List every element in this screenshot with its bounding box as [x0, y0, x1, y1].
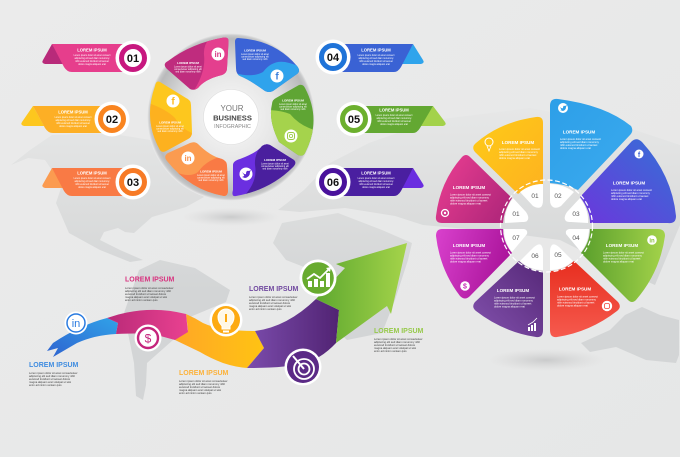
text block: yellow: enim ad minim veniam quis	[179, 391, 212, 395]
tab numbers: 05	[554, 252, 562, 259]
text block: pink: LOREM IPSUM	[125, 276, 175, 284]
pie chart	[436, 99, 676, 337]
tab numbers: 01	[512, 211, 520, 218]
pie segment: green: in	[649, 238, 655, 244]
text block: green	[374, 328, 424, 353]
pie segment: red	[550, 261, 620, 337]
arrow head: green	[316, 243, 407, 343]
shadow under wheel	[183, 208, 279, 226]
icon: target	[284, 348, 322, 386]
text block: purple: enim ad minim veniam quis	[249, 307, 282, 311]
wheel text: Lorem ipsum dolor sit amet	[156, 125, 184, 128]
pie segment: green: nibh euismod tincidunt ut laoreet	[603, 256, 641, 260]
pie segment: red: LOREM IPSUM	[559, 286, 591, 292]
tag 03	[42, 164, 151, 200]
pie segment: yellow: dolore magna aliquam erat	[499, 156, 530, 160]
wheel text: LOREM IPSUM	[200, 170, 222, 174]
world map	[11, 108, 680, 400]
tag 06: LOREM IPSUM	[361, 170, 391, 176]
text block: green: euismod tincidunt ut laoreet dolore	[374, 343, 416, 347]
tag 05: nibh euismod tincidunt ut laoreet	[377, 120, 411, 123]
wheel text: sed diam nonummy nibh	[242, 59, 268, 61]
tag 06: Lorem ipsum dolor sit amet consect	[358, 177, 395, 180]
pie dashed ring	[500, 180, 592, 272]
tag 06: 06	[327, 177, 339, 189]
text block: pink: Lorem ipsum dolor sit amet consectetuer	[125, 286, 174, 290]
pie segment: magenta: $	[463, 284, 467, 290]
icon: dollar	[134, 324, 162, 352]
text block: yellow: LOREM IPSUM	[179, 370, 229, 377]
tag 02: 02	[106, 114, 118, 126]
pie segment: red: adipiscing elit sed diam nonummy	[557, 298, 597, 302]
pie segment: magenta	[436, 229, 512, 298]
wheel segment: yellow	[150, 82, 192, 152]
tag 02: LOREM IPSUM	[58, 110, 88, 114]
wheel text: consectetuer adipiscing elit	[241, 56, 269, 58]
pie segment: green: Lorem ipsum dolor sit amet consect	[603, 250, 644, 254]
tab numbers: 04	[572, 235, 580, 242]
tag 02: Lorem ipsum dolor sit amet consect	[55, 116, 92, 119]
pie segment: magenta: Lorem ipsum dolor sit amet consect	[450, 250, 491, 254]
tag 05: 05	[348, 114, 360, 126]
wheel text: LOREM IPSUM	[244, 48, 266, 52]
pie segment: dark blue: f	[638, 152, 641, 159]
tab numbers: 02	[554, 193, 562, 200]
tag 01: nibh euismod tincidunt ut laoreet	[75, 60, 109, 63]
pie segment: green	[581, 229, 665, 302]
tag 01: Lorem ipsum dolor sit amet consect	[74, 54, 111, 57]
wheel	[148, 34, 314, 200]
pie segment: red: nibh euismod tincidunt ut laoreet	[557, 300, 595, 304]
pie segment: purple: dolore magna aliquam erat	[494, 304, 525, 308]
text block: blue: euismod tincidunt ut laoreet dolore	[29, 377, 71, 381]
wheel text: Lorem ipsum dolor sit amet	[261, 162, 289, 166]
pie segment: yellow: adipiscing elit sed diam nonummy	[499, 150, 539, 154]
wheel text	[156, 48, 307, 182]
text block: blue	[29, 362, 79, 387]
tag 04: adipiscing elit sed diam nonummy	[359, 57, 394, 60]
wheel text: LOREM IPSUM	[282, 98, 304, 102]
tag 05	[336, 102, 446, 136]
wheel segment: pink	[164, 38, 229, 90]
text block: pink: enim ad minim veniam quis	[125, 298, 158, 302]
tag 04: LOREM IPSUM	[361, 48, 391, 52]
tag 04: dolore magna aliquam erat	[362, 63, 390, 66]
text block: blue: magna aliquam erat volutpat ut wisi	[29, 380, 72, 384]
icon: dollar: $	[145, 332, 152, 346]
pie segment: red: Lorem ipsum dolor sit amet consect	[557, 294, 598, 298]
pie segment: yellow	[473, 117, 543, 194]
arrow segment: pink	[107, 310, 188, 340]
text block: yellow: Lorem ipsum dolor sit amet consectetuer	[179, 379, 228, 383]
wheel text: Lorem ipsum dolor sit amet	[174, 66, 202, 68]
wheel segment: purple	[232, 144, 296, 196]
wheel icons: f	[275, 72, 279, 82]
pie segment: pink: dolore magna aliquam erat	[450, 202, 481, 206]
wheel text: LOREM IPSUM	[264, 158, 286, 162]
wheel text: sed diam nonummy nibh	[262, 168, 288, 170]
tag 06	[316, 164, 424, 200]
text block: purple: Lorem ipsum dolor sit amet consectetuer	[249, 295, 298, 299]
text block: yellow: euismod tincidunt ut laoreet dolore	[179, 385, 221, 389]
pie segment: blue: Lorem ipsum dolor sit amet consect	[560, 137, 601, 141]
wheel text: consectetuer adipiscing elit	[261, 165, 289, 168]
wheel text: sed diam nonummy nibh	[198, 180, 224, 182]
text block: yellow: magna aliquam erat volutpat ut wisi	[179, 388, 222, 392]
text block: green: magna aliquam erat volutpat ut wisi	[374, 346, 417, 350]
text block: blue: LOREM IPSUM	[29, 362, 79, 369]
tag 03: dolore magna aliquam erat	[78, 186, 106, 189]
wheel icons: in	[214, 50, 222, 59]
text block: pink: magna aliquam erat volutpat ut wisi	[125, 295, 168, 299]
pie segment: purple: nibh euismod tincidunt ut laoreet	[494, 302, 532, 306]
pie segment: yellow: Lorem ipsum dolor sit amet consect	[499, 147, 540, 151]
text block: green: LOREM IPSUM	[374, 328, 424, 335]
pie segment: red: dolore magna aliquam erat	[557, 304, 588, 308]
wheel text: Lorem ipsum dolor sit amet	[241, 53, 269, 56]
wheel text: consectetuer adipiscing elit	[156, 128, 184, 130]
pie segment: green: LOREM IPSUM	[606, 243, 638, 248]
pie segment: purple: LOREM IPSUM	[497, 288, 529, 293]
wheel text: consectetuer adipiscing elit	[197, 176, 225, 180]
pie segment: green: dolore magna aliquam erat	[603, 260, 634, 264]
pie segment: pink: Lorem ipsum dolor sit amet consect	[450, 192, 491, 196]
text block: yellow: adipiscing elit sed diam nonummy nibh	[179, 382, 226, 386]
pie segment: pink: adipiscing elit sed diam nonummy	[450, 196, 490, 200]
wheel text: sed diam nonummy nibh	[157, 131, 183, 133]
pie segment: blue: dolore magna aliquam erat	[560, 146, 591, 150]
tag 06: nibh euismod tincidunt ut laoreet	[359, 183, 393, 186]
text block: purple: euismod tincidunt ut laoreet dolore	[249, 301, 291, 305]
pie segment: magenta: dolore magna aliquam erat	[450, 260, 481, 264]
wheel text: sed diam nonummy nibh	[175, 72, 201, 74]
tag 05: dolore magna aliquam erat	[380, 123, 408, 126]
icon: light bulb	[210, 304, 242, 336]
text block: green: adipiscing elit sed diam nonummy nibh	[374, 340, 421, 344]
pie segment: blue: adipiscing elit sed diam nonummy	[560, 140, 600, 144]
arrow segment: purple	[247, 299, 339, 368]
text block: blue: adipiscing elit sed diam nonummy nibh	[29, 374, 76, 378]
text block: blue: Lorem ipsum dolor sit amet consectetuer	[29, 371, 78, 375]
pie segment: dark blue	[580, 139, 676, 223]
wheel icons	[166, 48, 298, 180]
pie segment: dark blue: dolore magna aliquam erat	[611, 197, 642, 201]
pie segment: green: adipiscing elit sed diam nonummy	[603, 254, 643, 258]
tag 02: adipiscing elit sed diam nonummy	[56, 119, 91, 122]
tag 05: adipiscing elit sed diam nonummy	[377, 117, 412, 120]
pie segment: blue: nibh euismod tincidunt ut laoreet	[560, 143, 598, 147]
pie segment: magenta: LOREM IPSUM	[453, 243, 485, 248]
wheel text: Lorem ipsum dolor sit amet	[197, 174, 225, 177]
pie segment: yellow: nibh euismod tincidunt ut laoreet	[499, 153, 537, 157]
wheel text: LOREM IPSUM	[159, 120, 181, 124]
tab numbers: 06	[531, 253, 539, 260]
wheel centre: BUSINESS	[213, 114, 252, 122]
pie segment: blue: LOREM IPSUM	[563, 130, 595, 134]
tag 05: LOREM IPSUM	[379, 108, 409, 112]
wheel text: Lorem ipsum dolor sit amet	[279, 103, 307, 106]
arrow segment: yellow	[175, 314, 264, 368]
pie segment: purple	[473, 261, 543, 337]
tag 01: 01	[127, 53, 139, 65]
pie segment: pink: LOREM IPSUM	[453, 185, 485, 190]
pie segment: pink	[436, 155, 512, 223]
pie segment: blue	[550, 99, 632, 190]
number tabs	[504, 184, 589, 270]
tag 04	[316, 40, 424, 74]
pie segment: pink: nibh euismod tincidunt ut laoreet	[450, 198, 488, 202]
text block: green: Lorem ipsum dolor sit amet consectetuer	[374, 337, 423, 341]
curved arrow	[47, 243, 407, 368]
tag 01: LOREM IPSUM	[77, 48, 107, 52]
wheel text: consectetuer adipiscing elit	[279, 106, 307, 108]
tag 04: nibh euismod tincidunt ut laoreet	[359, 60, 393, 63]
pie segment: magenta: nibh euismod tincidunt ut laoreet	[450, 256, 488, 260]
tab numbers	[512, 193, 580, 260]
pie segment: yellow: LOREM IPSUM	[502, 140, 534, 145]
icon: linkedin	[64, 312, 88, 334]
wheel icons: f	[171, 96, 175, 108]
text block: pink: euismod tincidunt ut laoreet dolore	[125, 292, 167, 296]
wheel centre: INFOGRAPHIC	[214, 124, 251, 130]
wheel icons: in	[184, 154, 192, 163]
wheel segment: orange	[165, 142, 228, 196]
tag 06: adipiscing elit sed diam nonummy	[359, 180, 394, 183]
text block: purple	[249, 286, 299, 311]
pie segment: dark blue: nibh euismod tincidunt ut laoreet	[611, 194, 649, 198]
arrow segment: blue tail	[47, 318, 118, 357]
wheel centre: YOUR	[220, 104, 244, 113]
shadow under pie chart	[488, 349, 604, 371]
pie segment: dark blue: LOREM IPSUM	[613, 180, 645, 186]
wheel text: LOREM IPSUM	[177, 61, 199, 65]
tag 02: dolore magna aliquam erat	[59, 125, 87, 128]
tab numbers: 03	[572, 211, 580, 218]
wheel segment: green	[270, 84, 314, 156]
text block: pink: adipiscing elit sed diam nonummy nibh	[125, 289, 172, 293]
text block: pink	[125, 276, 175, 302]
tag 06: dolore magna aliquam erat	[362, 186, 390, 189]
pie segment: purple: adipiscing elit sed diam nonummy	[494, 298, 534, 302]
wheel centre	[204, 90, 258, 144]
tag 02	[21, 102, 129, 136]
wheel text: sed diam nonummy nibh	[280, 109, 306, 111]
tag 01: adipiscing elit sed diam nonummy	[75, 57, 110, 60]
tag 04: 04	[327, 52, 340, 64]
text block: green: enim ad minim veniam quis	[374, 349, 407, 353]
wheel segment: blue	[235, 38, 299, 92]
pie segment: magenta: adipiscing elit sed diam nonummy	[450, 254, 490, 258]
tab numbers: 01	[531, 193, 539, 200]
tag 01: dolore magna aliquam erat	[78, 63, 106, 66]
tag 04: Lorem ipsum dolor sit amet consect	[358, 54, 395, 57]
text block: purple: magna aliquam erat volutpat ut wisi	[249, 304, 292, 308]
tag 05: Lorem ipsum dolor sit amet consect	[376, 114, 413, 117]
tag 03: LOREM IPSUM	[77, 170, 107, 176]
tag 03: Lorem ipsum dolor sit amet consect	[74, 177, 111, 180]
text block: yellow	[179, 370, 229, 395]
tag 01	[42, 40, 151, 76]
tag 02: nibh euismod tincidunt ut laoreet	[56, 122, 90, 125]
icon: growth chart	[300, 260, 336, 296]
pie segment: dark blue: Lorem ipsum dolor sit amet consect	[611, 188, 652, 192]
pie segment: dark blue: adipiscing elit sed diam nonummy	[611, 191, 651, 195]
tag 03: 03	[127, 177, 139, 189]
tag 03: adipiscing elit sed diam nonummy	[75, 180, 110, 183]
icon: linkedin: in	[72, 318, 80, 330]
wheel text: consectetuer adipiscing elit	[174, 68, 202, 71]
tag 03: nibh euismod tincidunt ut laoreet	[75, 183, 109, 186]
text block: blue: enim ad minim veniam quis	[29, 383, 62, 387]
text block: purple: LOREM IPSUM	[249, 286, 299, 293]
tab numbers: 07	[512, 235, 520, 242]
pie segment: purple: Lorem ipsum dolor sit amet consect	[494, 296, 535, 300]
text block: purple: adipiscing elit sed diam nonummy nibh	[249, 298, 296, 302]
